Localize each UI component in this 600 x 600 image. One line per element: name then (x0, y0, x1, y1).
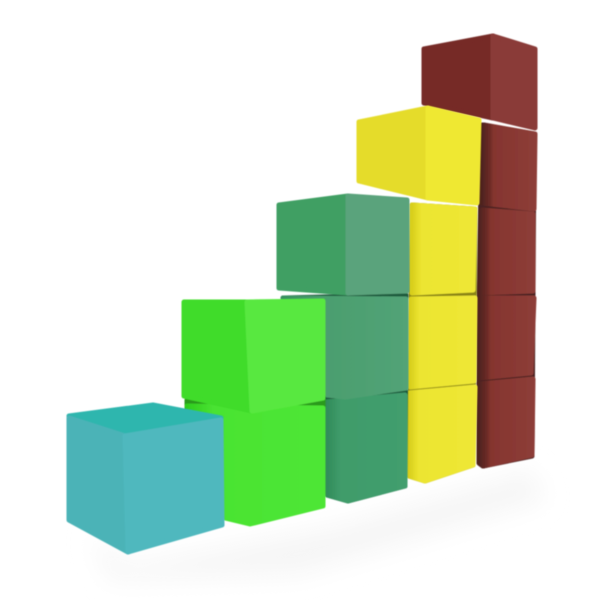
column: lime green blocks (184, 301, 323, 524)
column: brown blocks (424, 36, 535, 466)
yellow block 2 (412, 205, 475, 293)
lime block 2 (187, 406, 323, 524)
brown block 2 (482, 125, 535, 209)
yellow block 3 (410, 298, 475, 387)
brown block 5 (479, 379, 533, 466)
brown block 4 (479, 298, 534, 378)
dark green block 3 (325, 395, 405, 501)
floor shadow (90, 470, 545, 580)
lime block 1 top (184, 301, 323, 411)
column: dark green blocks (279, 196, 407, 501)
teal block (69, 405, 222, 552)
teal top face (69, 405, 221, 432)
lime column backing (187, 398, 323, 410)
yellow column backing (409, 205, 475, 481)
green column backing (283, 295, 406, 501)
yellow block 4 (409, 387, 475, 481)
brown block 3 (479, 210, 533, 293)
column: yellow blocks (359, 108, 479, 481)
teal left face (69, 418, 128, 552)
brown column backing (479, 125, 534, 466)
yellow block 1 top (359, 108, 479, 203)
dark green block 1 top (279, 196, 407, 293)
teal right face (125, 420, 222, 552)
brown block 1 top (424, 36, 535, 128)
dark green block 2 (283, 298, 406, 397)
